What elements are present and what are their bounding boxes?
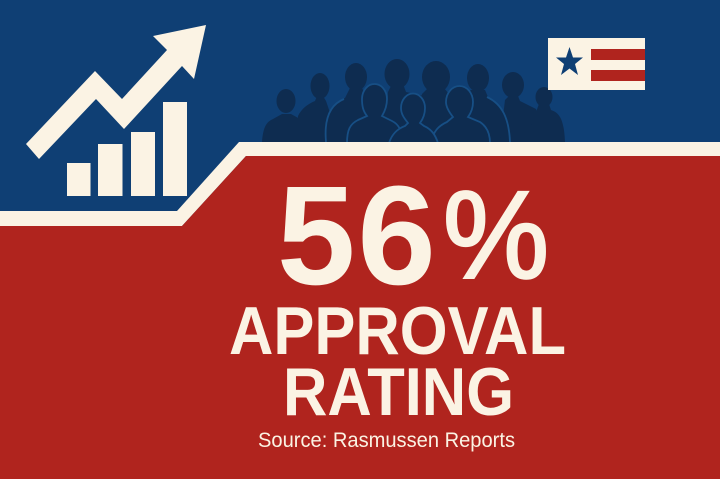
bar chart (67, 102, 187, 196)
panel: blue header background (0, 0, 720, 240)
icon: crowd silhouettes (262, 59, 565, 143)
big percentage figure: 56 (277, 156, 438, 314)
icon: flag (548, 38, 645, 90)
heading: rating: RATING (283, 354, 514, 430)
icon: rising trend arrow (26, 25, 206, 159)
panel: red lower background with cream band (0, 142, 720, 479)
big percentage figure: % (443, 167, 549, 305)
big percentage figure (277, 156, 549, 314)
source line: Source: Rasmussen Reports (258, 429, 515, 452)
heading: approval: APPROVAL (229, 293, 566, 369)
